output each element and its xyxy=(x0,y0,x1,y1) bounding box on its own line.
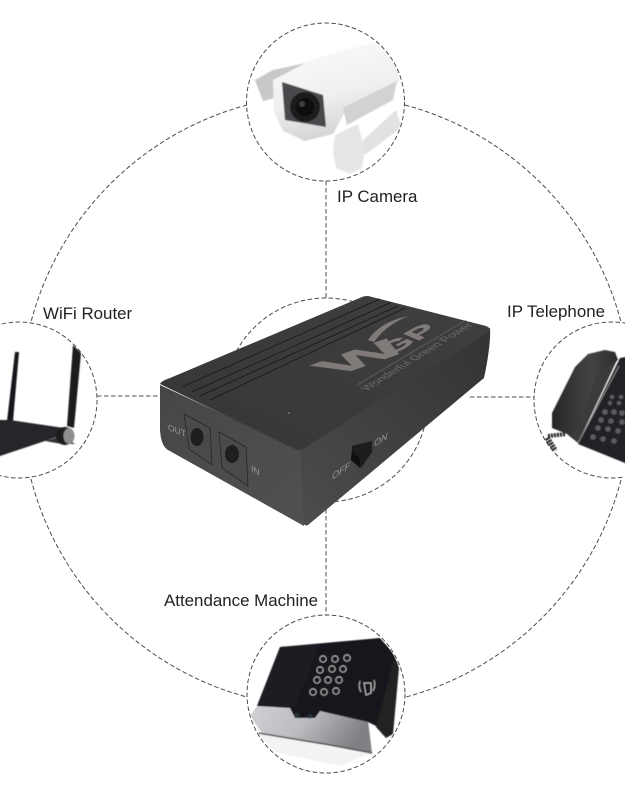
router front antenna xyxy=(67,345,81,428)
illustration: IP camera xyxy=(255,43,402,174)
logo tagline: Wonderful Green Power xyxy=(359,322,477,392)
terminal RFID icon xyxy=(359,680,375,695)
terminal silver base xyxy=(250,706,372,753)
phone coiled cord xyxy=(547,434,566,451)
terminal side panel xyxy=(376,655,399,738)
terminal sensors xyxy=(295,713,312,718)
phone handset xyxy=(552,350,618,436)
logo swoosh xyxy=(368,316,408,342)
phone cradle xyxy=(568,358,618,443)
box left face xyxy=(160,385,304,526)
box status LED xyxy=(288,412,290,414)
router shadow xyxy=(45,436,75,444)
box top face xyxy=(160,296,490,450)
camera mount column xyxy=(333,124,365,174)
OFF label: OFF xyxy=(332,460,351,483)
camera housing xyxy=(273,43,400,141)
OUT port xyxy=(184,414,212,465)
camera mount arm xyxy=(363,110,402,155)
label: Attendance Machine: Attendance Machine xyxy=(164,591,318,610)
phone base xyxy=(578,356,625,468)
ON label: ON xyxy=(374,431,388,450)
camera ribbed rear xyxy=(343,81,397,125)
box top grooves xyxy=(182,299,405,400)
IN label: IN xyxy=(251,464,260,478)
logo underline xyxy=(357,320,466,385)
router body xyxy=(0,420,64,456)
illustration: WiFi router xyxy=(0,345,81,456)
terminal keypad xyxy=(310,655,350,695)
phone base edge xyxy=(578,366,619,443)
camera sun hood xyxy=(254,63,304,102)
box logo xyxy=(302,316,477,392)
terminal base underside xyxy=(258,733,372,753)
box right face xyxy=(300,328,490,525)
illustration: IP telephone xyxy=(547,350,625,468)
logo GP: GP xyxy=(369,320,445,358)
terminal black panel xyxy=(257,638,395,727)
camera lens xyxy=(290,92,320,122)
logo W: W xyxy=(302,335,422,379)
illustration: attendance machine xyxy=(250,638,399,766)
router rear antenna xyxy=(7,352,19,421)
phone keypad xyxy=(590,395,625,444)
camera infrared panel xyxy=(282,82,326,127)
power switch xyxy=(351,441,372,468)
label: IP Camera: IP Camera xyxy=(337,187,418,206)
IN port xyxy=(219,432,248,486)
OUT label: OUT xyxy=(168,422,187,439)
device: WGP power box xyxy=(160,296,490,526)
terminal screen xyxy=(257,646,290,706)
router hinge knob xyxy=(56,427,74,445)
label: IP Telephone: IP Telephone xyxy=(507,302,605,321)
terminal floor shadow xyxy=(257,733,372,766)
label: WiFi Router: WiFi Router xyxy=(43,304,133,323)
